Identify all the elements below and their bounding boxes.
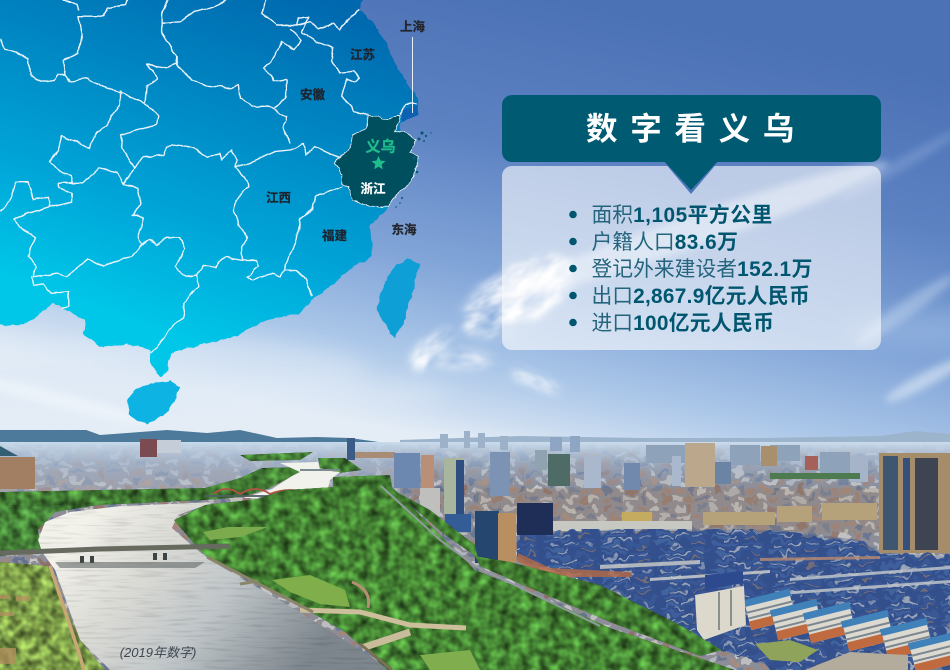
foreground houses: [743, 589, 950, 670]
road along park: [381, 486, 600, 626]
label: Yiwu: 义乌: [365, 138, 396, 156]
bridge over river: [0, 546, 230, 568]
white office building with blue sign: [695, 571, 746, 640]
soft tint lowering city contrast: [0, 444, 950, 670]
left field: [0, 562, 105, 670]
left tan building: [0, 457, 35, 489]
stat: exports: 出口2,867.9亿元人民币: [592, 285, 810, 308]
label: Fujian: 福建: [322, 228, 347, 243]
far bank right of upper river: [318, 458, 362, 473]
panel body: [502, 166, 881, 350]
aerial city photo illustration: [0, 420, 950, 670]
distant mountains: [0, 430, 378, 450]
map of east and south China: [0, 0, 432, 425]
label: Zhejiang: 浙江: [360, 181, 386, 196]
lawn: lower right: [420, 650, 480, 670]
mid-distance low-rise buildings: [552, 503, 877, 531]
left foreground dark hill: [0, 446, 18, 456]
orange and white house rows: [518, 553, 950, 595]
riverside path: [50, 566, 84, 670]
label: Jiangxi: 江西: [266, 191, 291, 205]
label: Anhui: 安徽: [300, 87, 325, 102]
pointer shadow: [664, 162, 718, 194]
sky background: [0, 0, 950, 445]
upper river segment: [243, 462, 340, 498]
clouds: [405, 239, 587, 397]
warm tint over right mid city: [475, 488, 880, 533]
heading banner: [502, 95, 881, 190]
atmospheric haze over distant city: [0, 442, 950, 490]
mainland landmass: [0, 0, 419, 377]
heading: 数字看义乌: [586, 110, 807, 146]
label: Jiangsu: 江苏: [350, 47, 375, 62]
tree strip beyond road: [388, 486, 478, 558]
park paths and plaza: [207, 557, 466, 670]
red arch bridge: [205, 489, 300, 496]
light tint over far-left city: [0, 448, 400, 494]
label: Shanghai leader line: [412, 37, 414, 113]
icon: star marking Yiwu: [372, 156, 386, 169]
panel: Yiwu in numbers: [502, 95, 881, 350]
caption: 2019 data note: (2019年数字): [120, 645, 196, 660]
city-side lawn: [755, 640, 818, 662]
far left buildings: [140, 438, 395, 460]
far green band: [240, 452, 313, 461]
small far bridge: [300, 469, 340, 471]
faint right mountains: [400, 431, 950, 442]
island: Hainan: [127, 380, 180, 425]
Zhejiang province highlighted: [334, 115, 418, 207]
central park green area: [174, 475, 735, 670]
parking lot: [805, 652, 908, 670]
main river: [38, 502, 392, 670]
statistics list: [569, 203, 813, 335]
label: East China Sea: 东海: [391, 222, 417, 237]
right skyline towers: [440, 431, 868, 496]
label: Shanghai: 上海: [400, 19, 425, 34]
island: Taiwan: [377, 258, 420, 338]
blue-roofed housing district: [517, 529, 950, 670]
field plots: [0, 595, 30, 664]
stat: imports: 进口100亿元人民币: [592, 312, 774, 335]
province borders: [0, 0, 417, 353]
Shanghai patch: [402, 105, 419, 122]
tall tan tower right: [879, 453, 950, 553]
trees along city road: [475, 556, 722, 656]
central towers: [394, 453, 471, 532]
stat: area: 面积1,105平方公里: [592, 203, 773, 227]
Zhejiang offshore islands: [395, 131, 432, 208]
lawn: river park: [203, 527, 268, 540]
lawn: central curved: [272, 575, 350, 607]
left bank trees: [0, 503, 110, 556]
far park bank left: [0, 467, 300, 510]
stat: registered migrants: 登记外来建设者152.1万: [592, 258, 813, 281]
city base: [0, 444, 950, 670]
tower at river road: [475, 503, 553, 563]
stat: registered population: 户籍人口83.6万: [592, 231, 738, 254]
